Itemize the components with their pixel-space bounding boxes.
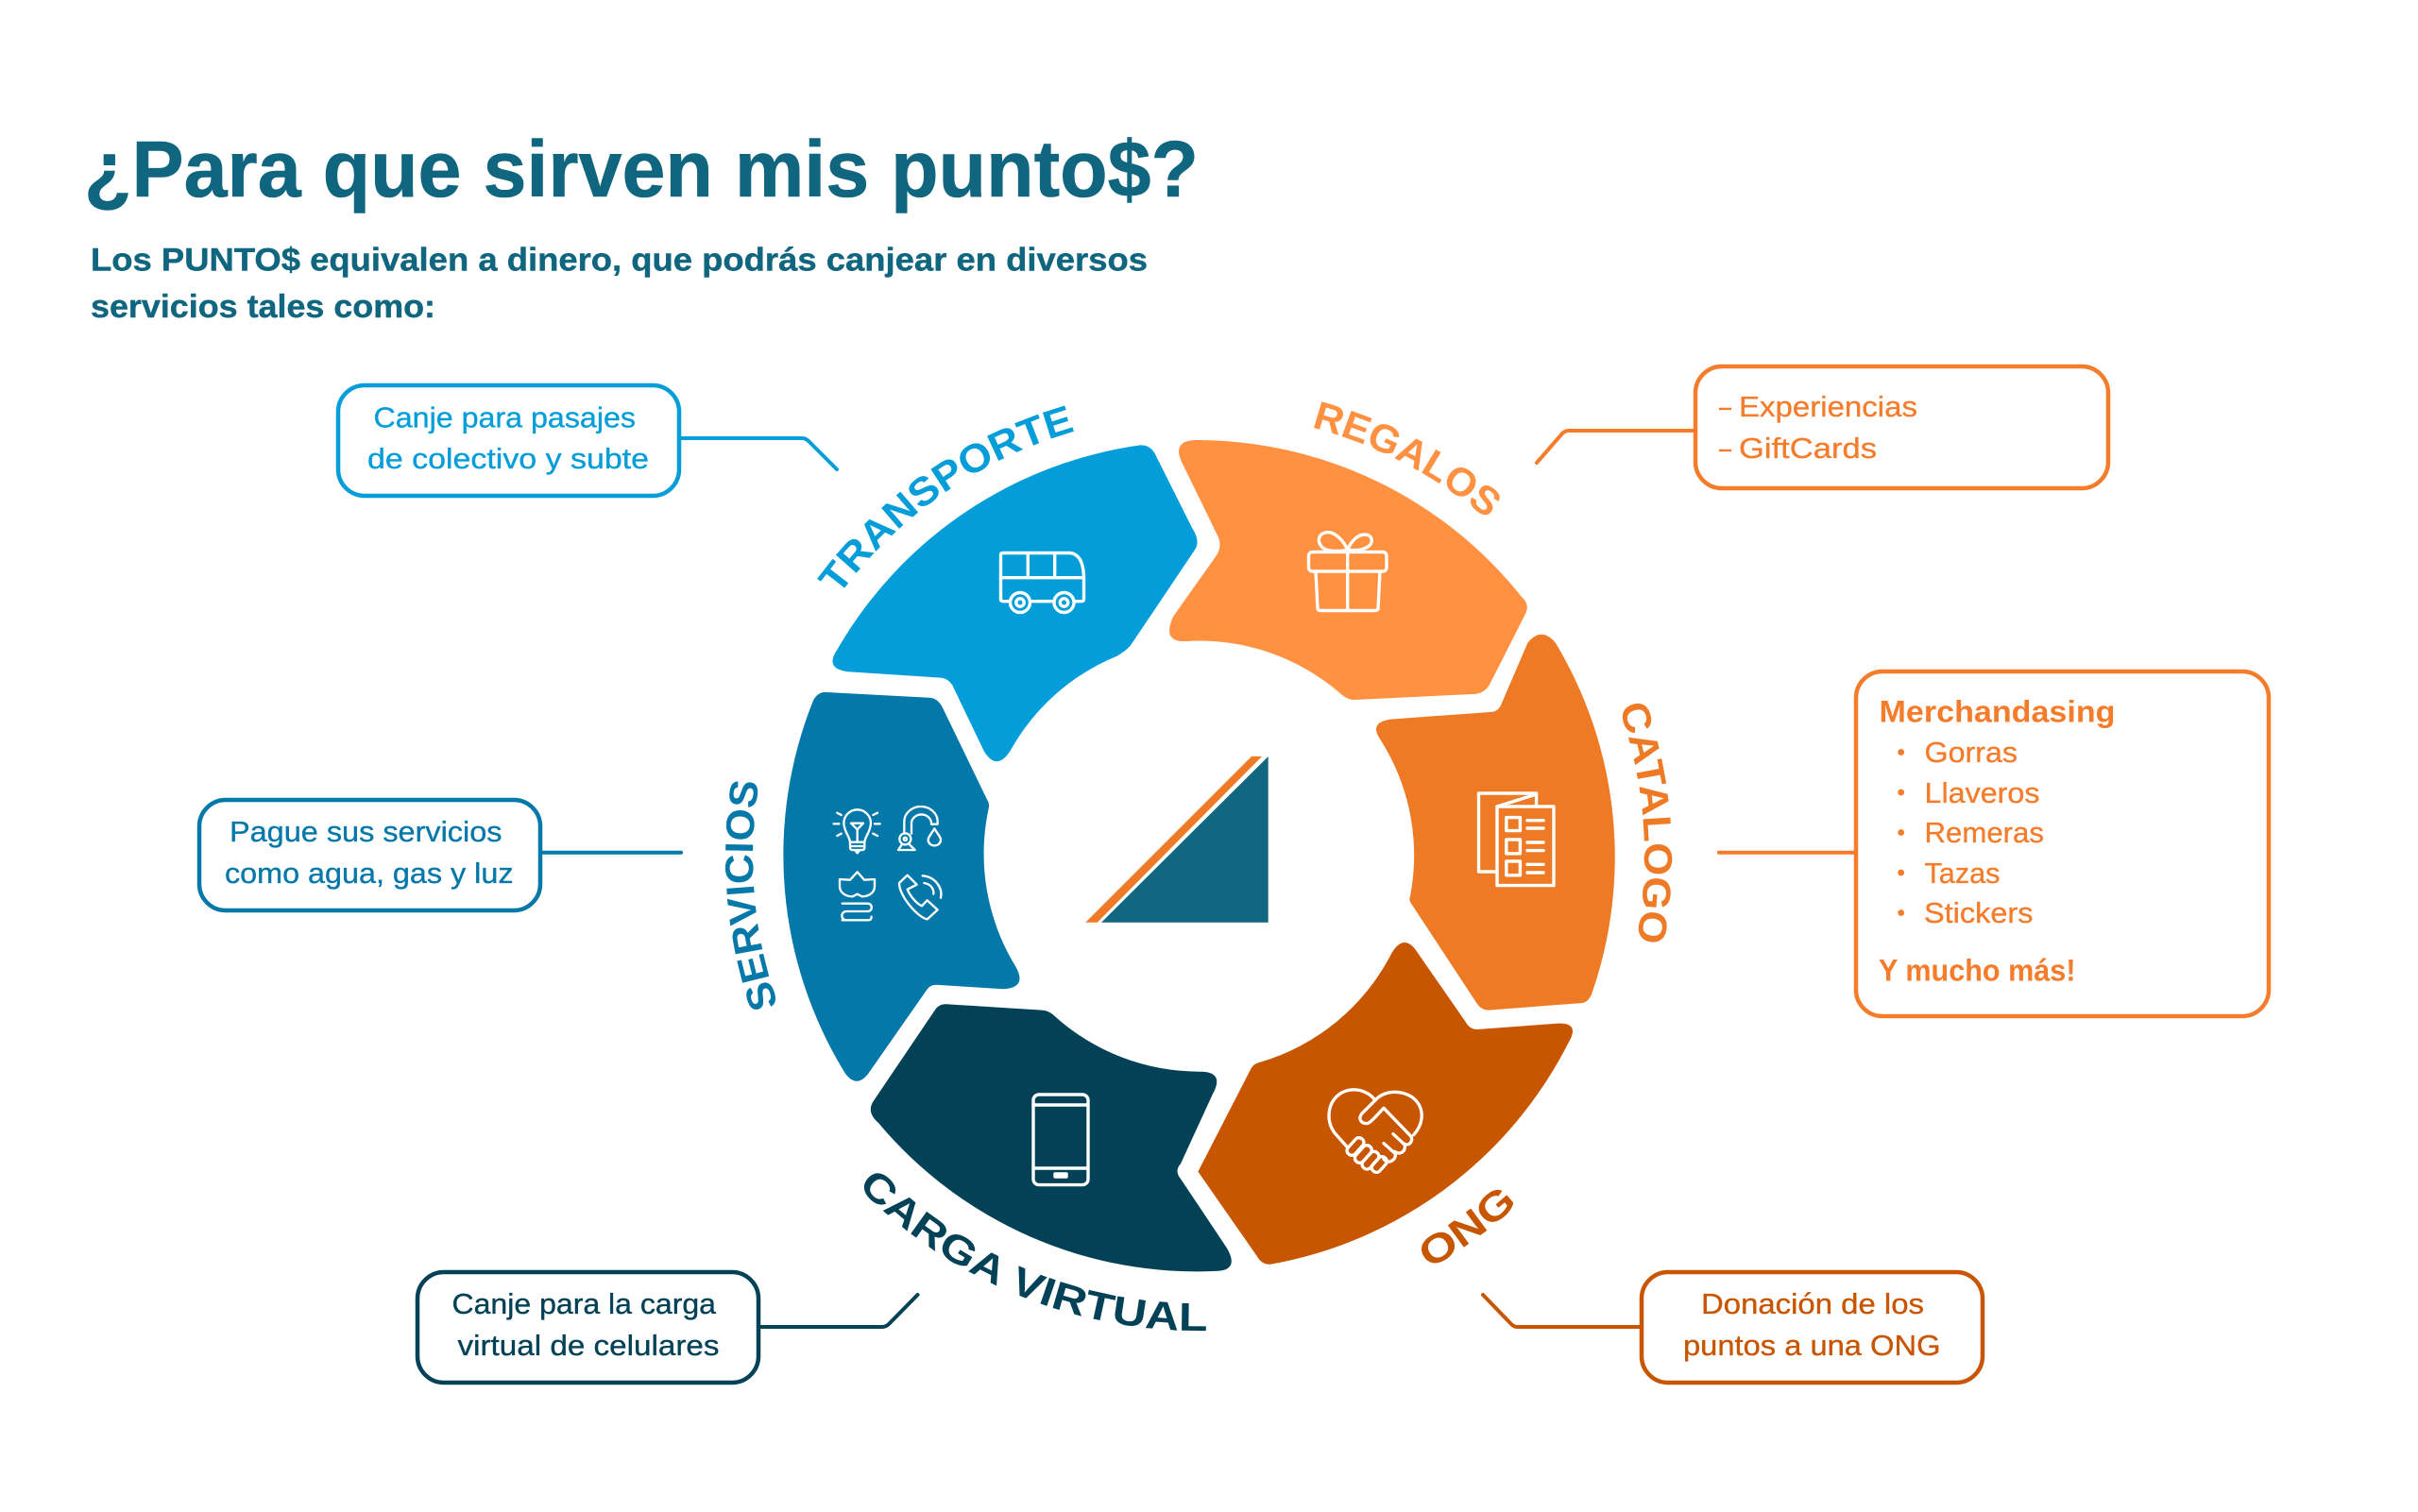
callout: catalogo: Gorras bbox=[1925, 736, 2018, 769]
segment: transporte bbox=[832, 445, 1198, 761]
callout: carga virtual: Canje para la carga bbox=[451, 1287, 717, 1320]
subtitle: Los PUNTO$ equivalen a dinero, que podrás canjear en diversos bbox=[91, 242, 1148, 278]
callout: transporte: Canje para pasajes bbox=[374, 400, 636, 433]
title: ¿Para que sirven mis punto$? bbox=[84, 125, 1199, 213]
segment: ong bbox=[1198, 943, 1573, 1265]
subtitle bbox=[91, 242, 1148, 325]
callout: catalogo: Stickers bbox=[1924, 896, 2033, 929]
segment: regalos bbox=[1169, 440, 1527, 700]
icon: bus bbox=[1001, 553, 1084, 612]
subtitle: servicios tales como: bbox=[91, 289, 435, 325]
label: ong: ONG bbox=[1422, 1190, 1513, 1264]
center logo triangle bbox=[1085, 756, 1269, 923]
callout: regalos bbox=[1537, 366, 2108, 488]
icon: catalog bbox=[1479, 793, 1554, 886]
icon: telephone bbox=[899, 875, 941, 919]
segment: catalogo bbox=[1376, 635, 1615, 1011]
callout: ong: puntos a una ONG bbox=[1683, 1329, 1940, 1362]
cycle diagram bbox=[783, 440, 1615, 1271]
callout: regalos: GiftCards bbox=[1739, 432, 1877, 465]
callout: catalogo bbox=[1719, 671, 2269, 1016]
callout: ong: Donación de los bbox=[1701, 1287, 1924, 1320]
icon: utilities bbox=[834, 807, 941, 920]
icon: handshake heart bbox=[1329, 1090, 1422, 1174]
callout: transporte: de colectivo y subte bbox=[367, 442, 649, 475]
icon: water tap bbox=[898, 807, 941, 850]
callout: regalos: Experiencias bbox=[1739, 390, 1917, 423]
callout: regalos: – bbox=[1719, 432, 1732, 465]
icon: light bulb bbox=[834, 809, 880, 853]
icon: gas flame bbox=[840, 872, 875, 920]
icon: gift bbox=[1309, 533, 1387, 610]
label: catalogo: CATALOGO bbox=[1623, 703, 1672, 943]
callout: carga virtual: virtual de celulares bbox=[457, 1329, 720, 1362]
callout: catalogo: Tazas bbox=[1925, 857, 2001, 890]
label: transporte: TRANSPORTE bbox=[817, 406, 1074, 587]
callout: catalogo: Y mucho más! bbox=[1879, 954, 2076, 988]
segment: carga virtual bbox=[871, 1004, 1232, 1271]
icon: phone bbox=[1033, 1095, 1088, 1185]
callout: servicios: como agua, gas y luz bbox=[225, 857, 514, 890]
segment: servicios bbox=[783, 692, 1019, 1081]
callout: transporte bbox=[338, 385, 837, 496]
callout: carga virtual bbox=[417, 1272, 918, 1383]
callout: regalos: – bbox=[1719, 390, 1732, 423]
callout: catalogo: Merchandasing bbox=[1880, 694, 2116, 728]
label: servicios: SERVICIOS bbox=[725, 781, 775, 1010]
label: carga virtual: CARGA VIRTUAL bbox=[863, 1173, 1206, 1332]
callout: catalogo: Remeras bbox=[1925, 816, 2044, 849]
callout: ong bbox=[1483, 1272, 1983, 1383]
callout: servicios: Pague sus servicios bbox=[230, 815, 502, 848]
callout: servicios bbox=[199, 800, 681, 910]
label: regalos: REGALOS bbox=[1314, 401, 1500, 516]
callout: catalogo: Llaveros bbox=[1925, 776, 2040, 809]
